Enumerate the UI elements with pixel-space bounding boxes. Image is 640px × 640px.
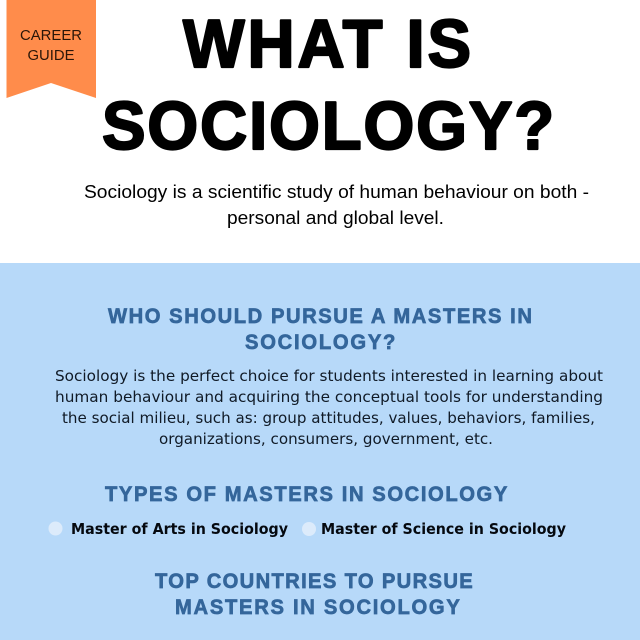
body paragraph [55,367,603,448]
title [102,7,554,164]
list item: master of science: Master of Science in Sociology [321,520,566,538]
heading: top countries: TOP COUNTRIES TO PURSUE [155,569,473,593]
intro text [84,182,589,228]
heading: top countries [155,569,473,619]
heading: who should pursue: SOCIOLOGY? [245,330,395,354]
list item: master of arts: Master of Arts in Sociology [71,520,288,538]
badge: career guide ribbon [6,0,96,98]
heading: who should pursue [108,304,532,354]
heading: types of masters: TYPES OF MASTERS IN SOCIOLOGY [105,482,507,506]
body paragraph: the social milieu, such as: group attitudes, values, behaviors, families, [62,409,595,427]
badge: career guide ribbon: GUIDE [28,48,75,64]
body paragraph: human behaviour and acquiring the conceptual tools for understanding [55,388,603,406]
intro text: personal and global level. [227,208,444,228]
panel: blue background [0,263,640,640]
body paragraph: Sociology is the perfect choice for students interested in learning about [55,367,603,385]
body paragraph: organizations, consumers, government, etc. [159,430,493,448]
heading: who should pursue: WHO SHOULD PURSUE A MASTERS IN [108,304,532,328]
title: SOCIOLOGY? [102,89,554,164]
badge: career guide ribbon: CAREER [20,28,82,44]
title: WHAT IS [183,7,471,82]
heading: top countries: MASTERS IN SOCIOLOGY [175,595,460,619]
intro text: Sociology is a scientific study of human behaviour on both - [84,182,589,202]
